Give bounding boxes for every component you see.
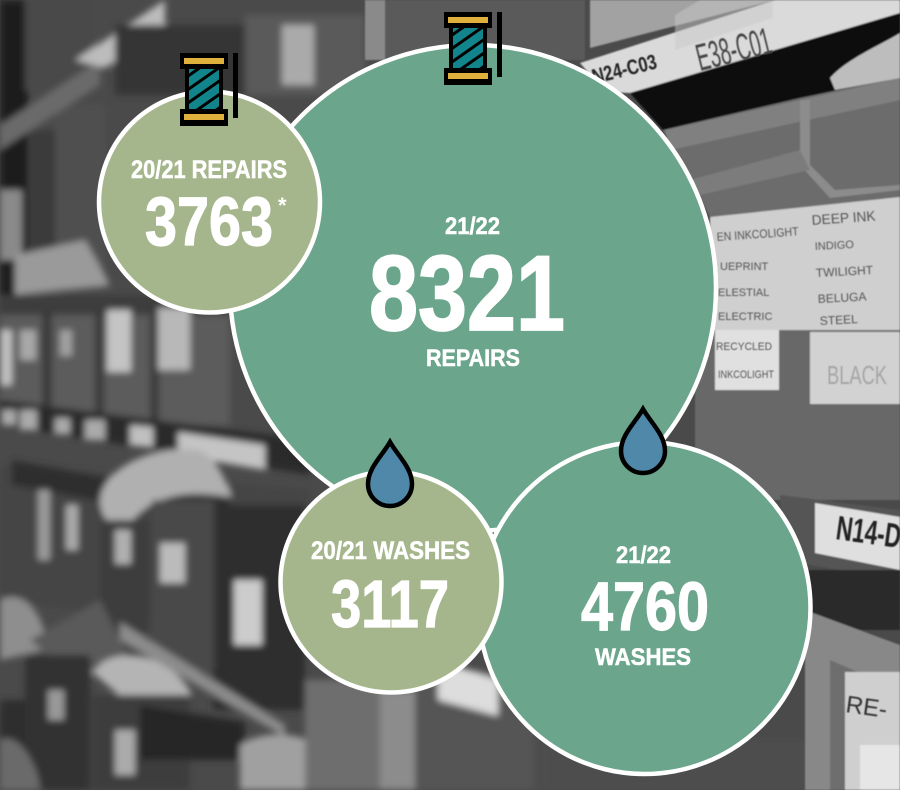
label: 21/22: 21/22 [445, 213, 500, 240]
shelf labels and handwriting in the photo: UEPRINT [720, 261, 769, 273]
shelf labels and handwriting in the photo: N24-C03 [590, 51, 659, 89]
shelf labels and handwriting in the photo: STEEL [819, 312, 858, 328]
shelf labels and handwriting in the photo: DEEP INK [811, 208, 877, 228]
label: 21/22: 21/22 [616, 542, 671, 569]
label: washes: WASHES [595, 644, 691, 671]
number: 3763 with asterisk: 3763 [145, 183, 273, 260]
icon: thread spool on 21/22 repairs [444, 12, 502, 85]
shelf labels and handwriting in the photo [590, 21, 900, 724]
shelf labels and handwriting in the photo: INDIGO [815, 239, 855, 253]
number: 3117: 3117 [331, 567, 449, 642]
number: 4760: 4760 [581, 568, 709, 645]
label: repairs: REPAIRS [426, 345, 520, 372]
shelf labels and handwriting in the photo: TWILIGHT [815, 263, 874, 280]
circle: 21/22 repairs [230, 45, 716, 531]
number: 8321: 8321 [369, 233, 565, 353]
circle: 20/21 repairs [99, 92, 320, 312]
circle: 21/22 washes [478, 442, 810, 774]
footnote asterisk: * [278, 193, 287, 218]
shelf labels and handwriting in the photo: E38-C01 [692, 21, 776, 80]
shelf labels and handwriting in the photo: EN INKCOLIGHT [716, 224, 800, 244]
shelf labels and handwriting in the photo: ELECTRIC [718, 311, 772, 323]
icon: water drop on 21/22 washes [621, 409, 665, 473]
icon: water drop on 20/21 washes [368, 442, 412, 506]
shelf labels and handwriting in the photo: RECYCLED [716, 341, 772, 353]
label: 20/21 washes: 20/21 WASHES [311, 537, 470, 565]
icon: thread spool on 20/21 repairs [180, 53, 238, 126]
shelf labels and handwriting in the photo: INKCOLIGHT [718, 369, 774, 381]
shelf labels and handwriting in the photo: ELESTIAL [718, 287, 769, 299]
right shelves, sharper [365, 0, 900, 790]
shelf labels and handwriting in the photo: RE- [844, 691, 889, 724]
label: 20/21 repairs: 20/21 REPAIRS [131, 156, 287, 184]
shelf labels and handwriting in the photo: BELUGA [817, 289, 867, 306]
circle: 20/21 washes [280, 472, 502, 692]
